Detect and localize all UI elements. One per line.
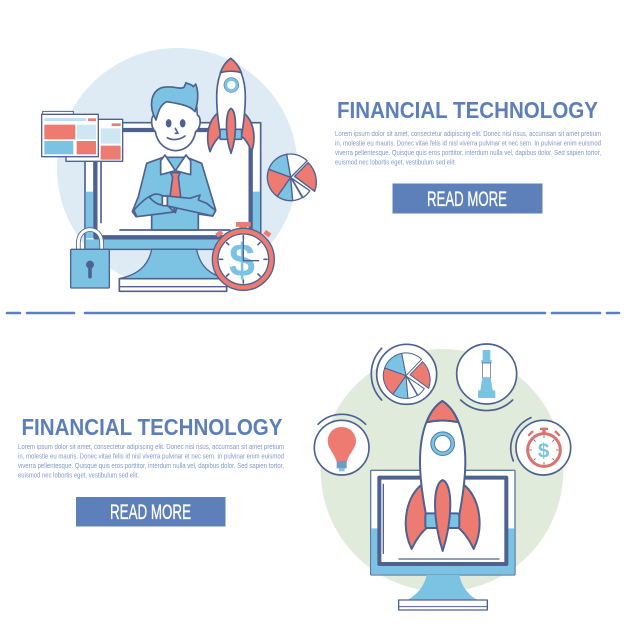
illustration: businessman at monitor: [42, 48, 316, 291]
stopwatch: [212, 222, 274, 290]
body text: top section: [335, 129, 601, 166]
monitor: [371, 470, 515, 610]
button: bottom read more: [76, 497, 226, 526]
businessman: [132, 83, 216, 230]
body text: bottom section: in, molestie eu mauris. Donec vitae felis id nisl viverra pulvinar et nec sem. In pulvinar enim euismod: [18, 452, 284, 460]
dashed divider: [7, 312, 619, 314]
heading: top section: FINANCIAL TECHNOLOGY: [337, 97, 598, 123]
body text: top section: euismod nec lobortis eget, vestibulum sed elit.: [335, 158, 456, 166]
rocket: [208, 58, 254, 153]
dollar sign: $: [538, 439, 550, 462]
body text: bottom section: Lorem ipsum dolor sit amet, consectetur adipiscing elit. Donec nisi risus, accumsan sit amet pretium: [18, 442, 284, 451]
body text: bottom section: viverra pellentesque. Quisque quis eros porttitor, interdum nulla vel, dapibus dolor. Sed sapien tortor,: [18, 461, 284, 470]
heading: bottom section: FINANCIAL TECHNOLOGY: [22, 414, 282, 440]
background circle: [321, 349, 563, 592]
body text: bottom section: euismod nec lobortis eget, vestibulum sed elit.: [18, 470, 139, 480]
icon: stopwatch badge: [511, 418, 571, 475]
illustration: rocket launching from monitor: [314, 344, 571, 610]
background circle: [57, 48, 298, 289]
body text: bottom section: [18, 442, 284, 480]
button: bottom read more: READ MORE: [110, 501, 191, 524]
icon: chess piece badge: [457, 344, 517, 411]
dollar sign: $: [229, 234, 255, 286]
icon: pie chart badge: [371, 344, 437, 404]
icon: light bulb badge: [314, 414, 369, 475]
pie chart: [267, 154, 316, 201]
button: top read more: [392, 184, 542, 214]
web page windows: [42, 111, 123, 161]
monitor: [85, 123, 261, 291]
padlock: [71, 230, 109, 288]
rocket: [406, 401, 480, 551]
button: top read more: READ MORE: [427, 188, 507, 211]
